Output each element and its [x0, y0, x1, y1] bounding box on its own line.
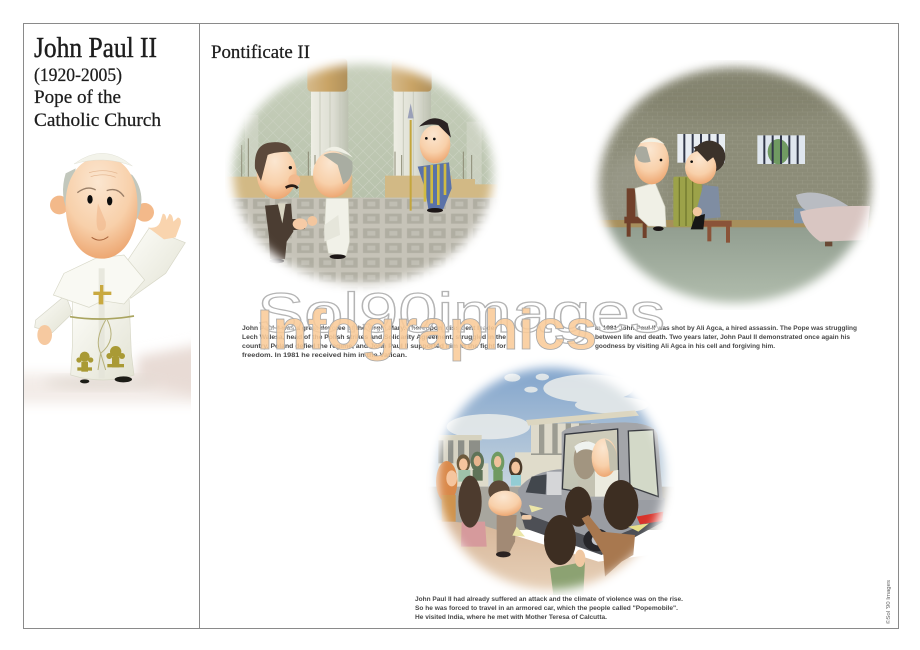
- smile: [92, 237, 108, 240]
- title block: John Paul II: Pope of the: [34, 87, 121, 108]
- wall: [590, 60, 880, 227]
- eyes: [87, 195, 93, 204]
- brows and wrinkles: [77, 188, 124, 197]
- person: Mother Teresa: [574, 440, 596, 496]
- title block: John Paul II: (1920-2005): [34, 65, 122, 86]
- temple right: [515, 410, 639, 486]
- caption: Lech Walesa meeting: John Paul II was a great devotee of the Virgin Mary. Thereupon, dissident leader: [242, 325, 498, 332]
- arm left: [35, 295, 72, 333]
- wall: [225, 55, 505, 198]
- cape: [53, 255, 145, 307]
- embroidery: [76, 346, 125, 372]
- hand waving: [148, 214, 181, 239]
- caption: Lech Walesa meeting: [242, 325, 507, 359]
- shoes: [80, 379, 89, 383]
- bed: [794, 192, 870, 246]
- ears: [50, 196, 69, 214]
- caption: Popemobile: So he was forced to travel in an armored car, which the people called "Popemobile".: [415, 605, 678, 612]
- illustration: Popemobile crowd: [425, 355, 675, 595]
- foreground: man with flag: [488, 480, 543, 557]
- robe: [71, 297, 134, 380]
- stool: [702, 221, 732, 243]
- radiator: [673, 177, 702, 227]
- planters: [228, 176, 498, 198]
- Popemobile: [518, 422, 665, 555]
- pectoral cross: [93, 285, 111, 304]
- zucchetto: [74, 153, 132, 166]
- temple left: [438, 435, 488, 487]
- illustration: meeting with Lech Walesa: [225, 55, 505, 298]
- spear: [410, 120, 412, 211]
- illustration: visit to Ali Agca in prison: [590, 60, 880, 310]
- person: Lech Walesa: [255, 142, 307, 263]
- heading: Pontificate II: Pontificate II: [211, 42, 310, 63]
- foreground: child with flag: [582, 480, 649, 577]
- head: [66, 157, 137, 259]
- caption: Lech Walesa meeting: country. Poland defied the regime, and John Paul II supported him in the fight for: [242, 343, 507, 350]
- baseboard: [600, 220, 870, 228]
- chair: [624, 188, 647, 238]
- person: Ali Agca seated: [685, 141, 725, 229]
- floor shadow: [24, 372, 191, 405]
- person: Pope: [307, 147, 353, 259]
- caption: Lech Walesa meeting: freedom. In 1981 he received him in the Vatican.: [242, 352, 407, 359]
- watermark: Sol90images Infographics: [257, 281, 665, 362]
- watermark: Sol90images Infographics: Sol90images: [257, 281, 665, 344]
- person: Pope in car: [592, 438, 618, 497]
- foreground: child with dark hair: [565, 487, 592, 527]
- cord: [70, 316, 134, 319]
- sky: [432, 361, 670, 487]
- floor: [590, 227, 880, 310]
- title block: John Paul II: John Paul II: [34, 33, 157, 64]
- capitals: [307, 58, 347, 92]
- foreground: girl in pink: [458, 476, 487, 547]
- window right: [757, 135, 805, 164]
- buttons strip: [99, 268, 105, 378]
- caption: assassination attempt: In 1981 John Paul II was shot by Ali Agca, a hired assassin. The Pope was struggling: [595, 325, 857, 332]
- caption: Popemobile: [415, 596, 683, 621]
- caption: assassination attempt: goodness by visiting Ali Agca in his cell and forgiving him.: [595, 343, 775, 350]
- background crowd: [436, 452, 522, 522]
- watermark: Sol90images Infographics: Infographics: [257, 298, 597, 362]
- caption: Popemobile: He visited India, where he met with Mother Teresa of Calcutta.: [415, 614, 607, 621]
- title block: John Paul II: [34, 33, 162, 131]
- nose: [97, 203, 106, 231]
- columns: [311, 90, 348, 176]
- title block: John Paul II: Catholic Church: [34, 110, 162, 131]
- hair: [63, 168, 76, 215]
- person: Swiss Guard: [408, 103, 452, 213]
- floor: [230, 198, 494, 290]
- caption: Popemobile: John Paul II had already suffered an attack and the climate of violence was on the rise.: [415, 596, 683, 603]
- ground: [441, 520, 640, 595]
- person: Pope seated: [634, 138, 669, 231]
- road: [425, 487, 675, 530]
- arm raised: [126, 228, 185, 298]
- window left: [677, 134, 725, 163]
- illustration: waving Pope portrait: [24, 153, 191, 406]
- caption: Lech Walesa meeting: Lech Walesa, head of the Polish strikes and Solidarity Agreement, struggled in the: [242, 334, 506, 341]
- caption: assassination attempt: between life and death. Two years later, John Paul II demonstrated once again his: [595, 334, 850, 341]
- clouds: [447, 374, 648, 439]
- caption: assassination attempt: [595, 325, 857, 350]
- copyright note: ©Sol '90 Images: [885, 580, 892, 624]
- foreground: child in green: [544, 515, 585, 595]
